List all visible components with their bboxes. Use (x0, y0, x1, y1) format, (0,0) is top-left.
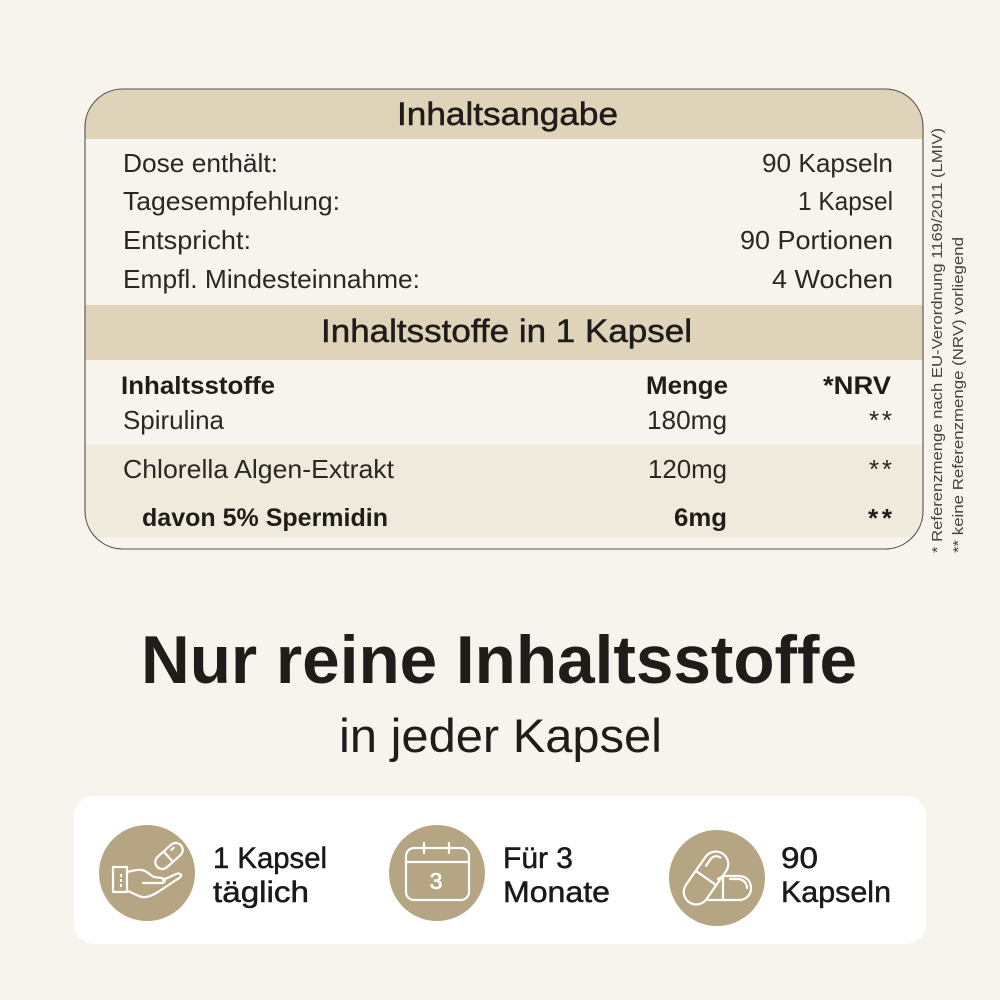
text block: package details: 90 Portionen (740, 225, 893, 255)
table column headers: Inhaltsstoffe (121, 372, 275, 400)
table row: Spermidin (142, 503, 893, 533)
subtitle: in jeder Kapsel (339, 709, 662, 762)
table row: Spirulina (123, 405, 892, 435)
text block: package details: 90 Kapseln (762, 148, 893, 178)
label: 1 Kapsel täglich: 1 Kapsel (213, 842, 327, 875)
label: Für 3 Monate (503, 842, 610, 909)
text block: package details: Entspricht: (123, 225, 251, 255)
label: Für 3 Monate: Für 3 (503, 842, 573, 875)
icon: capsules (669, 830, 765, 926)
text block: package details: Tagesempfehlung: (123, 186, 340, 216)
icon: calendar (389, 825, 485, 921)
text block: package details: 1 Kapsel (798, 186, 893, 216)
title: Nur reine Inhaltsstoffe (141, 622, 857, 698)
icon: calendar: 3 (430, 868, 442, 894)
text block: package details (123, 148, 893, 294)
table row: Spermidin: davon 5% Spermidin (142, 504, 388, 532)
text block: package details: Empfl. Mindesteinnahme: (123, 264, 420, 294)
table row: Spirulina: Spirulina (123, 405, 225, 435)
table row: Chlorella (123, 454, 892, 484)
footnotes (929, 128, 967, 553)
label: 1 Kapsel täglich (213, 842, 327, 909)
table row: Spermidin: ** (868, 503, 893, 533)
table row: Chlorella: ** (869, 454, 892, 484)
table column headers (121, 372, 891, 400)
footnotes: * Referenzmenge nach EU-Verordnung 1169/2011 (LMIV) (929, 128, 946, 553)
text block: package details: 4 Wochen (772, 264, 893, 294)
table row: Spirulina: ** (869, 405, 892, 435)
label: 90 Kapseln: Kapseln (781, 876, 891, 909)
label: 90 Kapseln: 90 (781, 842, 818, 875)
text block: package details: Dose enthält: (123, 148, 278, 178)
icon: hand with capsule (99, 825, 195, 921)
heading: Inhaltsstoffe in 1 Kapsel: Inhaltsstoffe in 1 Kapsel (321, 313, 692, 349)
table row: Spermidin: 6mg (674, 504, 727, 532)
table column headers: *NRV (823, 372, 891, 400)
label: 90 Kapseln (781, 842, 891, 909)
panel: nutrition table (85, 89, 923, 549)
heading: Inhaltsangabe: Inhaltsangabe (397, 96, 618, 132)
label: 1 Kapsel täglich: täglich (213, 876, 309, 909)
table row: Spirulina: 180mg (647, 405, 727, 435)
table row: Chlorella: 120mg (648, 454, 727, 484)
label: Für 3 Monate: Monate (503, 876, 610, 909)
panel: dosage facts (74, 796, 926, 944)
table row: Chlorella: Chlorella Algen-Extrakt (123, 454, 395, 484)
table column headers: Menge (646, 372, 728, 400)
footnotes: ** keine Referenzmenge (NRV) vorliegend (950, 237, 967, 553)
